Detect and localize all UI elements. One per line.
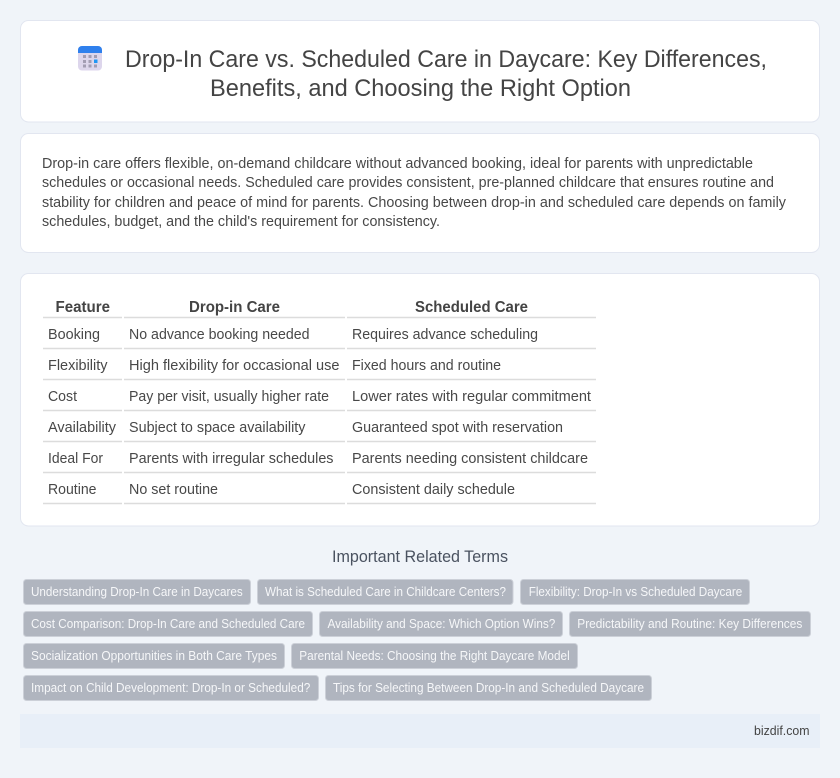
- tag: flexibility: Flexibility: Drop-In vs Scheduled Daycare: [529, 585, 742, 599]
- tag: flexibility: [520, 580, 750, 604]
- table row: routine: Routine: [48, 482, 96, 498]
- table header row: Drop-in Care: [189, 299, 280, 316]
- table row: cost: Cost: [48, 389, 77, 405]
- tag: availability and space: Availability and Space: Which Option Wins?: [328, 617, 555, 631]
- table row: ideal for: Parents with irregular schedules: [129, 451, 334, 467]
- panel: comparison table: [20, 274, 820, 526]
- title: Drop-In Care vs. Scheduled Care in Daycare: Key Differences,: [125, 46, 767, 73]
- table row: cost: [43, 389, 596, 410]
- tag: what is scheduled care: What is Scheduled Care in Childcare Centers?: [265, 585, 506, 599]
- table row: cost: Lower rates with regular commitment: [352, 389, 591, 405]
- tag: cost comparison: Cost Comparison: Drop-In Care and Scheduled Care: [31, 617, 305, 631]
- tag: understanding drop-in care: Understanding Drop-In Care in Daycares: [31, 585, 243, 599]
- panel: summary paragraph: [20, 134, 820, 252]
- table row: flexibility: [43, 358, 596, 380]
- table row: availability: Subject to space availability: [129, 420, 306, 436]
- table row: booking: No advance booking needed: [129, 327, 310, 343]
- tag: socialization: Socialization Opportunities in Both Care Types: [31, 649, 277, 663]
- footer: bizdif.com: [754, 723, 810, 738]
- panel: title header: [20, 20, 820, 122]
- table row: cost: Pay per visit, usually higher rate: [129, 389, 329, 405]
- tag: socialization: [24, 644, 284, 668]
- title: [125, 46, 767, 102]
- heading: important related terms: Important Related Terms: [332, 548, 508, 566]
- table row: flexibility: Fixed hours and routine: [352, 358, 501, 374]
- text block: summary: schedules, budget, and the child's requirement for consistency.: [42, 214, 440, 230]
- table row: availability: [43, 420, 596, 442]
- tag: child development: Impact on Child Development: Drop-In or Scheduled?: [31, 681, 310, 695]
- tag: selection tips: [326, 676, 652, 700]
- text block: summary: stability for children and peace of mind for parents. Choosing between drop-in and scheduled care depends on family: [42, 195, 787, 211]
- table header row: Scheduled Care: [415, 299, 528, 316]
- table row: ideal for: Parents needing consistent childcare: [352, 451, 588, 467]
- text block: summary: [42, 156, 787, 230]
- tag group: related terms: [24, 580, 810, 700]
- tag: predictability and routine: [570, 612, 810, 636]
- tag: understanding drop-in care: [24, 580, 250, 604]
- icon: calendar: [78, 46, 102, 70]
- tag: what is scheduled care: [258, 580, 513, 604]
- text block: summary: schedules or occasional needs. Scheduled care provides consistent, pre-planned childcare that ensures routine and: [42, 175, 774, 191]
- footer: [20, 714, 820, 748]
- text block: summary: Drop-in care offers flexible, on-demand childcare without advanced booking, ideal for parents with unpredictable: [42, 156, 753, 172]
- table row: ideal for: Ideal For: [48, 451, 103, 467]
- tag: selection tips: Tips for Selecting Between Drop-In and Scheduled Daycare: [333, 681, 644, 695]
- title: Benefits, and Choosing the Right Option: [210, 75, 631, 102]
- table row: booking: Booking: [48, 327, 100, 343]
- table row: booking: [43, 327, 596, 348]
- table row: flexibility: Flexibility: [48, 358, 108, 374]
- tag: cost comparison: [24, 612, 312, 636]
- table row: availability: Availability: [48, 420, 117, 436]
- table row: flexibility: High flexibility for occasional use: [129, 358, 340, 374]
- table row: routine: Consistent daily schedule: [352, 482, 515, 498]
- table row: booking: Requires advance scheduling: [352, 327, 538, 343]
- table row: routine: No set routine: [129, 482, 218, 498]
- table header row: Feature: [56, 299, 110, 316]
- table row: ideal for: [43, 451, 596, 472]
- tag: child development: [24, 676, 318, 700]
- tag: availability and space: [320, 612, 562, 636]
- table row: routine: [43, 482, 596, 504]
- table row: availability: Guaranteed spot with reservation: [352, 420, 563, 436]
- tag: parental needs: [292, 644, 578, 668]
- table header row: [43, 299, 596, 318]
- tag: parental needs: Parental Needs: Choosing the Right Daycare Model: [299, 649, 570, 663]
- tag: predictability and routine: Predictability and Routine: Key Differences: [577, 617, 802, 631]
